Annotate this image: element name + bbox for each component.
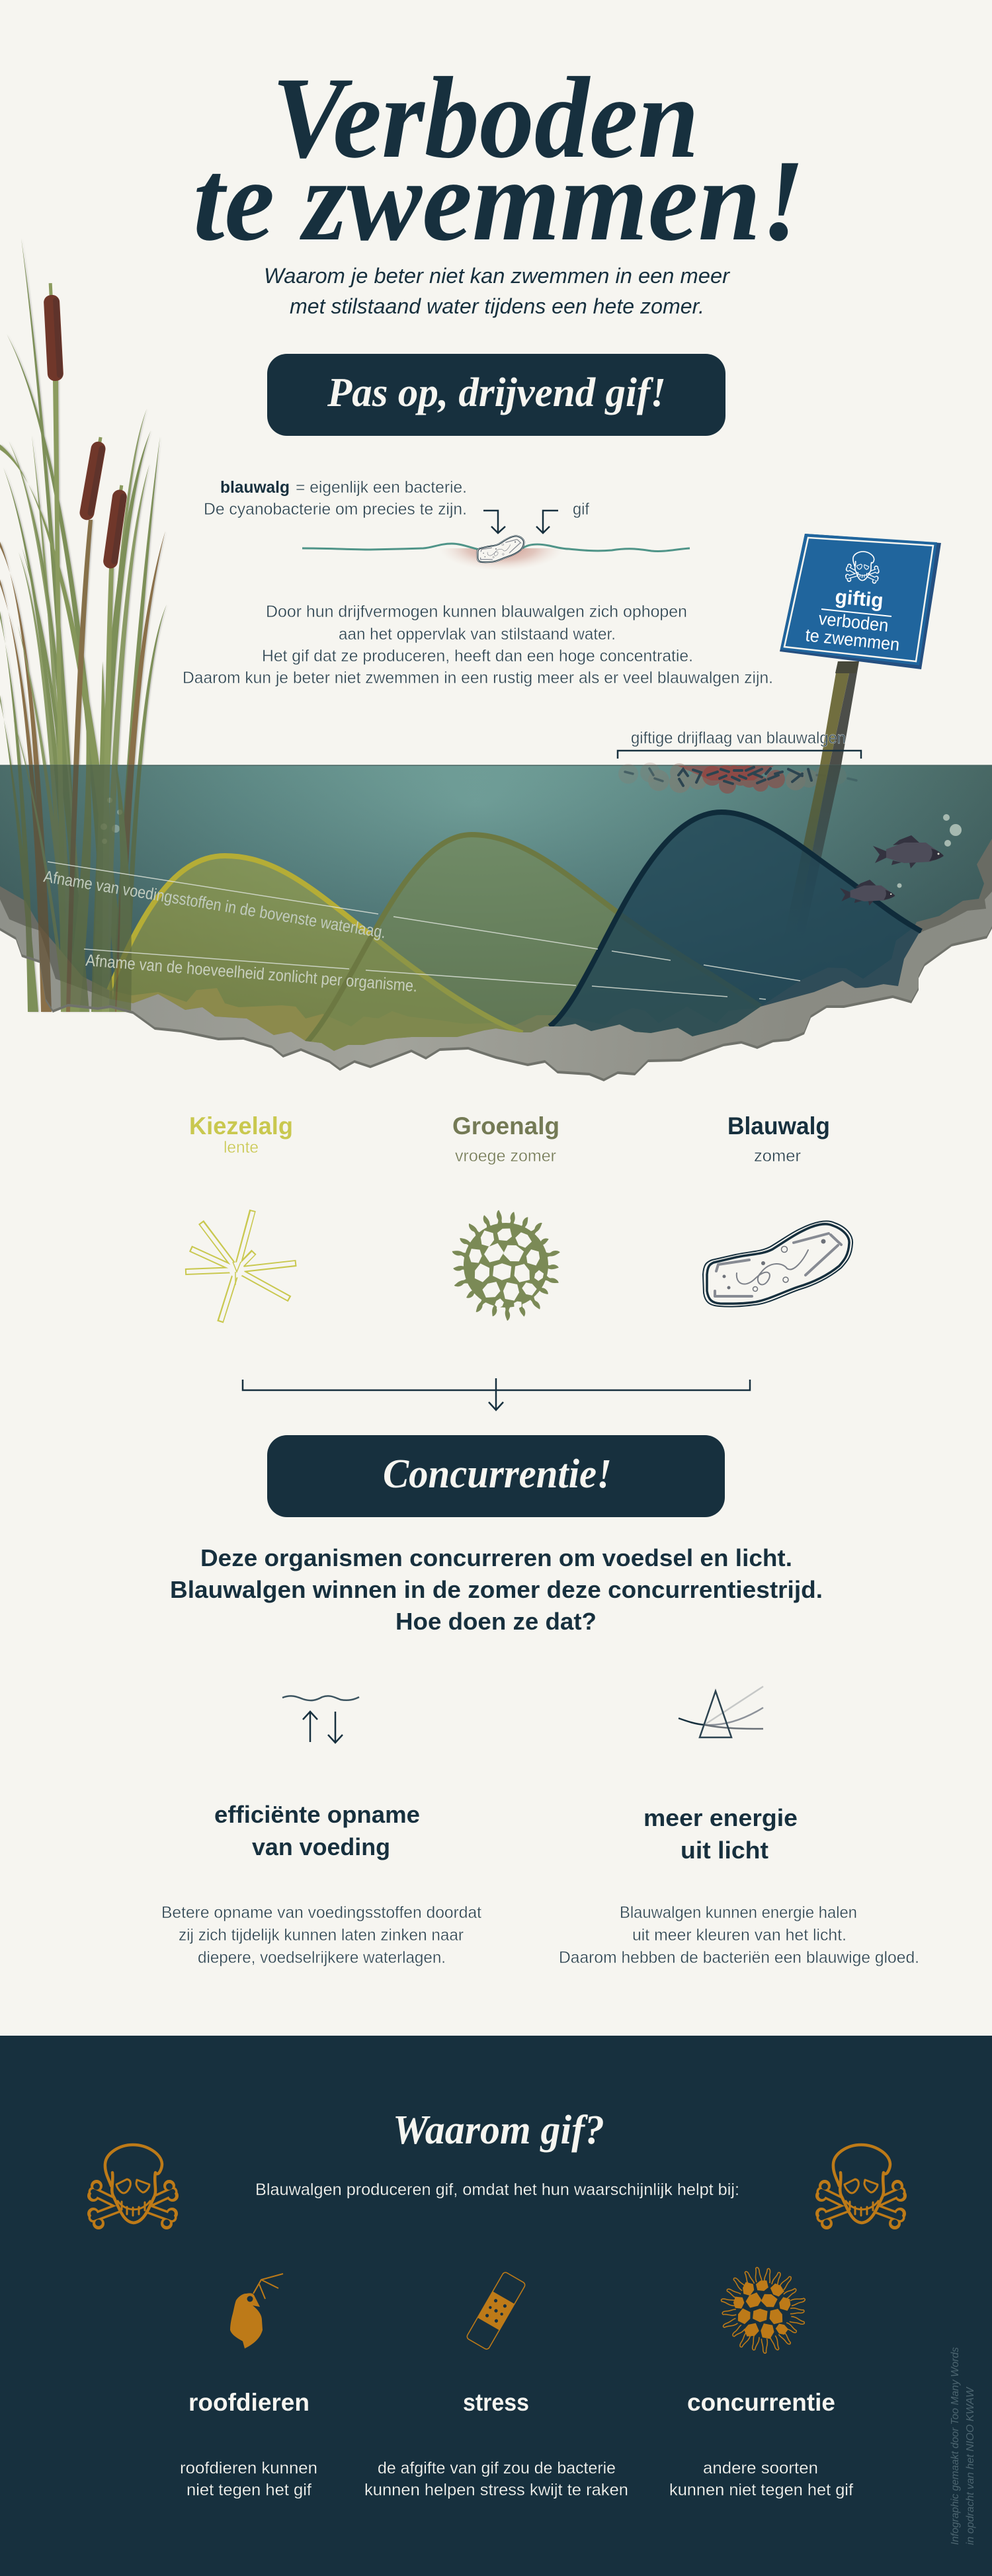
column: roofdieren [180,2274,317,2499]
blauwalg curve [548,810,923,1036]
bracket: drijflaag [618,751,861,759]
warning sign: verboden [817,608,889,636]
intro text: concurrentie: Hoe doen ze dat? [395,1608,597,1635]
column: kiezelalg [185,1112,296,1322]
column: efficiënte opname: diepere, voedselrijkere waterlagen. [198,1948,446,1967]
text block: drijfvermogen: aan het oppervlak van stilstaand water. [339,625,616,644]
lake bed rock [0,765,992,1081]
heading box: Pas op, drijvend gif!: Pas op, drijvend gif! [327,370,666,415]
sign pole above water [820,661,859,765]
column: groenalg: Groenalg [452,1112,559,1140]
column: meer energie: Daarom hebben de bacteriën een blauwige gloed. [559,1948,919,1967]
text block: drijfvermogen: Daarom kun je beter niet zwemmen in een rustig meer als er veel blauwalgen zijn. [183,669,773,687]
column: concurrentie: concurrentie [687,2389,835,2416]
icon: prism [679,1686,763,1737]
text: blauwalg definition: De cyanobacterie om precies te zijn. [204,500,467,519]
heading box: Concurrentie! [267,1435,725,1517]
icon: water with up and down arrows [282,1696,359,1743]
kiezelalg curve [107,853,524,1051]
label: giftige drijflaag: giftige drijflaag van blauwalgen [631,729,846,747]
label: afname voedingsstoffen: Afname van voedingsstoffen in de bovenste waterlaag. [42,867,388,942]
intro text: concurrentie: Blauwalgen winnen in de zomer deze concurrentiestrijd. [170,1576,823,1603]
column: stress: de afgifte van gif zou de bacterie [378,2459,616,2477]
column: stress: stress [463,2389,529,2416]
icon: algae cell [721,2267,806,2353]
icon: kiezelalg star [185,1210,296,1322]
column: blauwalg [703,1112,852,1307]
water [0,765,992,1026]
reeds under water [10,765,142,1011]
decline lines [48,862,800,999]
column: meer energie: uit meer kleuren van het licht. [632,1926,847,1944]
floating toxic layer of blue-green algae [618,763,856,794]
intro text: waarom gif: Blauwalgen produceren gif, omdat het hun waarschijnlijk helpt bij: [255,2181,739,2199]
subtitle: met stilstaand water tijdens een hete zomer. [290,294,704,318]
warning sign: giftig [834,586,884,612]
column: meer energie: Blauwalgen kunnen energie halen [620,1903,857,1922]
column: concurrentie [669,2267,853,2499]
icon: left skull [89,2145,177,2228]
arrows pointing to bacterium and gif [483,511,558,533]
fish [840,835,944,905]
groenalg curve [305,832,762,1051]
subtitle: Waarom je beter niet kan zwemmen in een meer [264,264,730,288]
warning sign [780,534,941,669]
text: blauwalg definition: = eigenlijk een bacterie. [296,478,467,497]
bubbles [101,798,962,888]
column: meer energie: uit licht [681,1837,768,1864]
column: concurrentie: kunnen niet tegen het gif [669,2481,853,2499]
text: blauwalg definition: gif [573,500,589,519]
text: blauwalg definition: blauwalg [220,478,290,497]
icon: groenalg cell [451,1210,561,1321]
icon: copepod [230,2274,283,2348]
credit: Infographic gemaakt door Too Many Words [950,2347,961,2545]
column: stress [364,2271,628,2499]
credit [950,2347,976,2545]
column: blauwalg: Blauwalg [727,1112,830,1140]
bracket arrow to concurrentie [243,1378,750,1410]
column: efficiënte opname: efficiënte opname [214,1801,420,1828]
column: groenalg [451,1112,561,1321]
intro text: concurrentie: Deze organismen concurreren om voedsel en licht. [200,1544,792,1571]
column: roofdieren: niet tegen het gif [186,2481,311,2499]
title: te zwemmen! [193,136,805,265]
text block: drijfvermogen: Het gif dat ze produceren, heeft dan een hoge concentratie. [262,647,693,665]
label: afname zonlicht: Afname van de hoeveelheid zonlicht per organisme. [85,951,418,995]
column: meer energie: meer energie [643,1804,798,1831]
column: efficiënte opname: zij zich tijdelijk kunnen laten zinken naar [179,1926,464,1944]
illustration: bacterium floating on water with poison glow [302,535,690,567]
column: meer energie [559,1686,919,1967]
icon: right skull [817,2145,905,2228]
column: efficiënte opname: van voeding [252,1833,390,1860]
text block: drijfvermogen: Door hun drijfvermogen kunnen blauwalgen zich ophopen [266,602,687,621]
heading: waarom gif: Waarom gif? [393,2108,604,2153]
column: concurrentie: andere soorten [703,2459,818,2477]
sign pole under water [784,765,841,939]
icon: bandage [466,2271,526,2350]
title: Verboden [272,54,699,183]
column: efficiënte opname: Betere opname van voedingsstoffen doordat [161,1903,481,1922]
text block: drijfvermogen [183,602,773,687]
heading box: Pas op, drijvend gif! [267,354,725,436]
column: blauwalg: zomer [754,1147,801,1165]
column: efficiënte opname [161,1696,481,1967]
illustration: reeds with cattails [0,238,167,1012]
column: stress: kunnen helpen stress kwijt te raken [364,2481,628,2499]
text: blauwalg definition [204,478,589,519]
intro text: concurrentie [170,1544,823,1635]
column: roofdieren: roofdieren [188,2389,310,2416]
panel: waarom gif [0,2036,992,2576]
illustration: lake with algae curves [0,763,992,1081]
warning sign: te zwemmen [804,625,901,655]
subtitle [264,264,730,318]
column: roofdieren: roofdieren kunnen [180,2459,317,2477]
title [193,54,805,265]
column: kiezelalg: Kiezelalg [189,1112,293,1140]
column: kiezelalg: lente [224,1138,259,1157]
heading box: Concurrentie!: Concurrentie! [383,1452,612,1497]
credit: in opdracht van het NIOO KWAW [965,2386,976,2545]
column: groenalg: vroege zomer [455,1147,556,1165]
icon: blauwalg bacterium [703,1221,852,1307]
